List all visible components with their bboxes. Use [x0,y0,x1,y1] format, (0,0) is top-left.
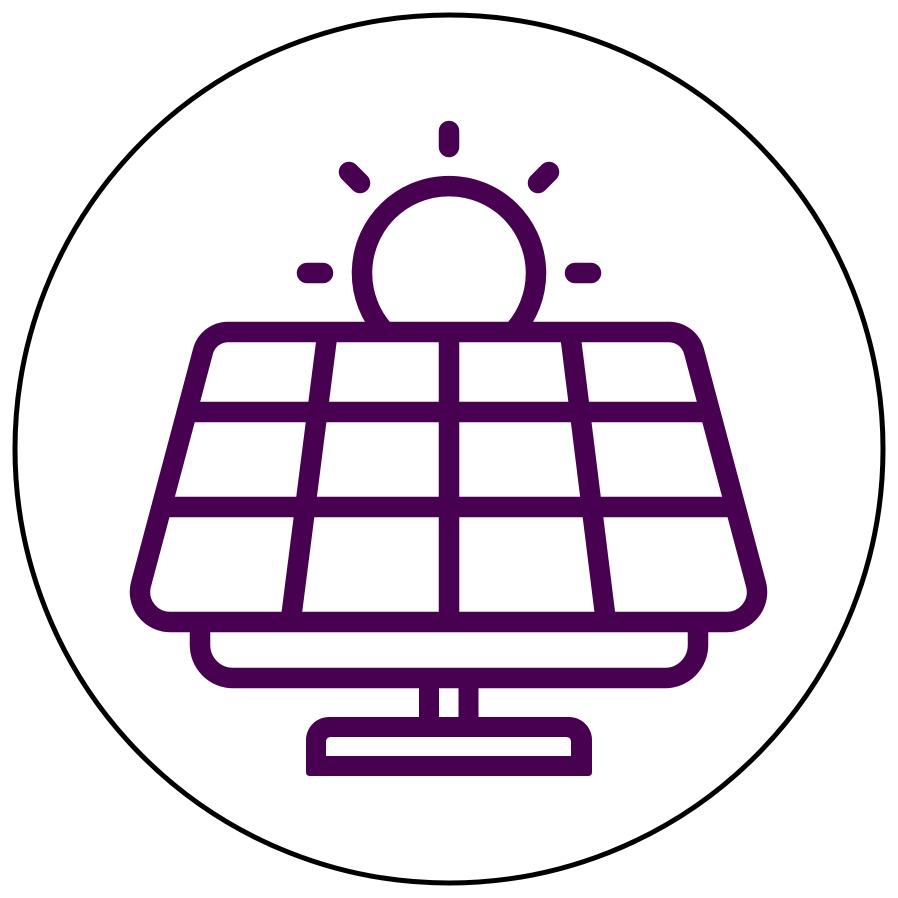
stand base [306,717,592,776]
icon: sun [307,131,591,332]
icon: panel [140,332,757,622]
stand legs [429,678,468,727]
icon: stand [200,622,698,776]
stand bracket [200,622,698,678]
